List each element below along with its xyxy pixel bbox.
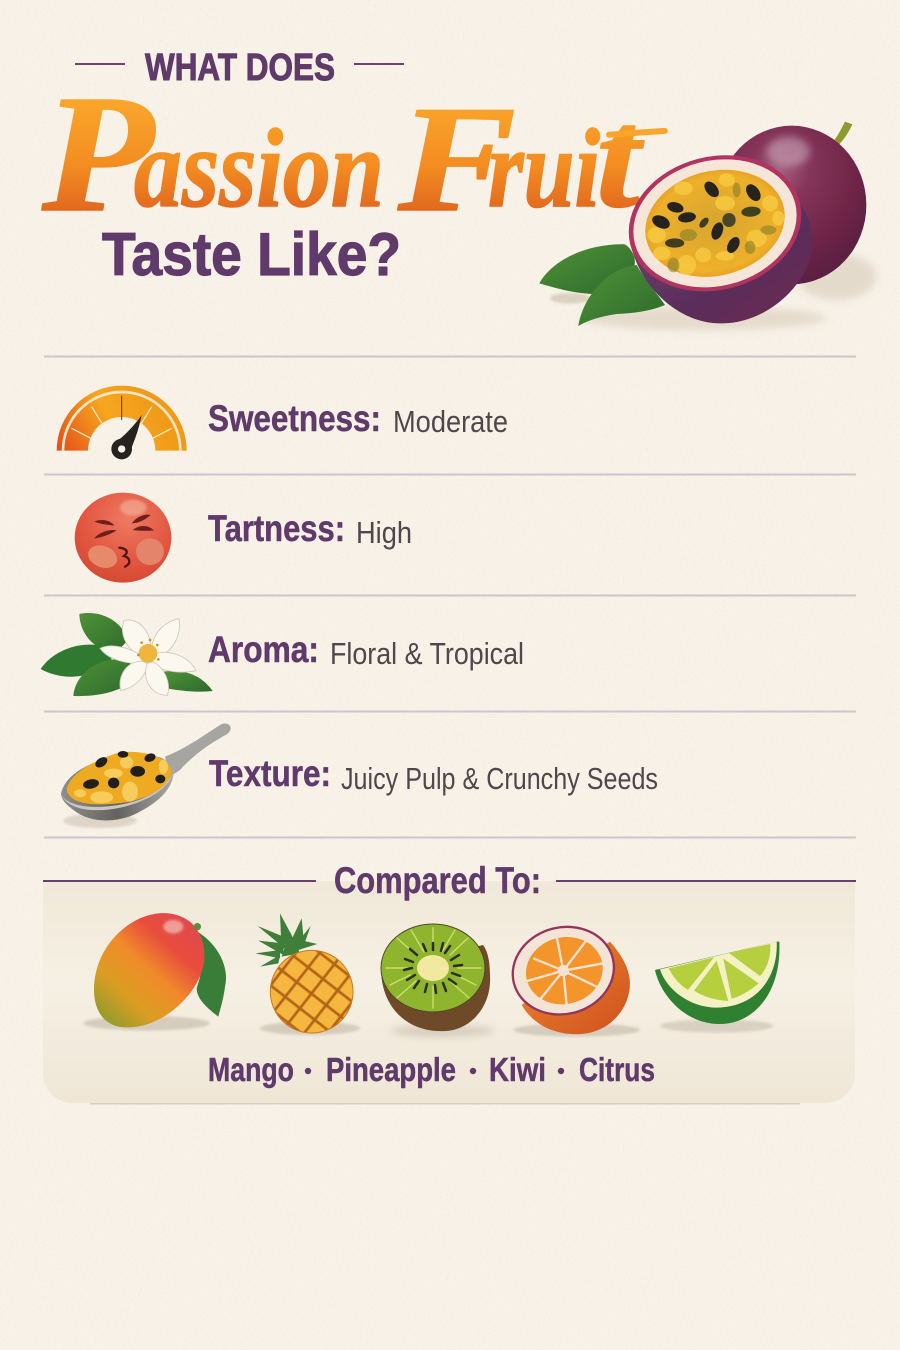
title: Passion Fruit: F	[397, 75, 516, 243]
row: aroma: Floral & Tropical	[330, 636, 524, 671]
illustration: passion fruit	[539, 122, 877, 330]
row: texture: Juicy Pulp & Crunchy Seeds	[341, 761, 658, 796]
label: fruit names: Kiwi	[489, 1051, 546, 1088]
row: sweetness: Sweetness:	[208, 398, 381, 439]
label: fruit names: Mango	[208, 1051, 294, 1088]
row: texture	[61, 724, 658, 828]
icon: kiwi	[381, 924, 494, 1037]
divider lines	[44, 356, 856, 838]
title: Passion Fruit: P	[41, 61, 156, 247]
row: aroma	[41, 613, 524, 696]
icon: mango	[83, 913, 226, 1031]
label: fruit names: Citrus	[579, 1051, 655, 1088]
heading: compared to: Compared To:	[334, 860, 541, 901]
icon: gauge	[57, 386, 187, 459]
header: what does: WHAT DOES	[145, 47, 335, 89]
row: tartness: Tartness:	[208, 508, 345, 549]
panel: compared to	[43, 860, 856, 1104]
label: fruit names: Pineapple	[326, 1051, 456, 1088]
label: fruit names	[208, 1051, 655, 1088]
icon: spoon with pulp	[61, 724, 231, 828]
row: sweetness	[57, 386, 508, 459]
row: texture: Texture:	[209, 753, 331, 794]
title: Passion Fruit: rui	[488, 107, 600, 231]
row: sweetness: Moderate	[393, 404, 508, 439]
row: tartness	[75, 493, 412, 583]
row: tartness: High	[356, 515, 412, 550]
icon: pineapple	[255, 913, 360, 1035]
title: Passion Fruit	[41, 61, 668, 247]
subtitle: taste like: Taste Like?	[102, 221, 401, 288]
title: Passion Fruit: t	[596, 79, 644, 237]
icon: flower and leaves	[41, 613, 213, 696]
icon: lime wedge	[655, 942, 779, 1033]
title: Passion Fruit: assion	[134, 107, 384, 231]
row: aroma: Aroma:	[208, 629, 319, 670]
icon: citrus half	[503, 916, 640, 1037]
icon: sour face	[75, 493, 171, 583]
